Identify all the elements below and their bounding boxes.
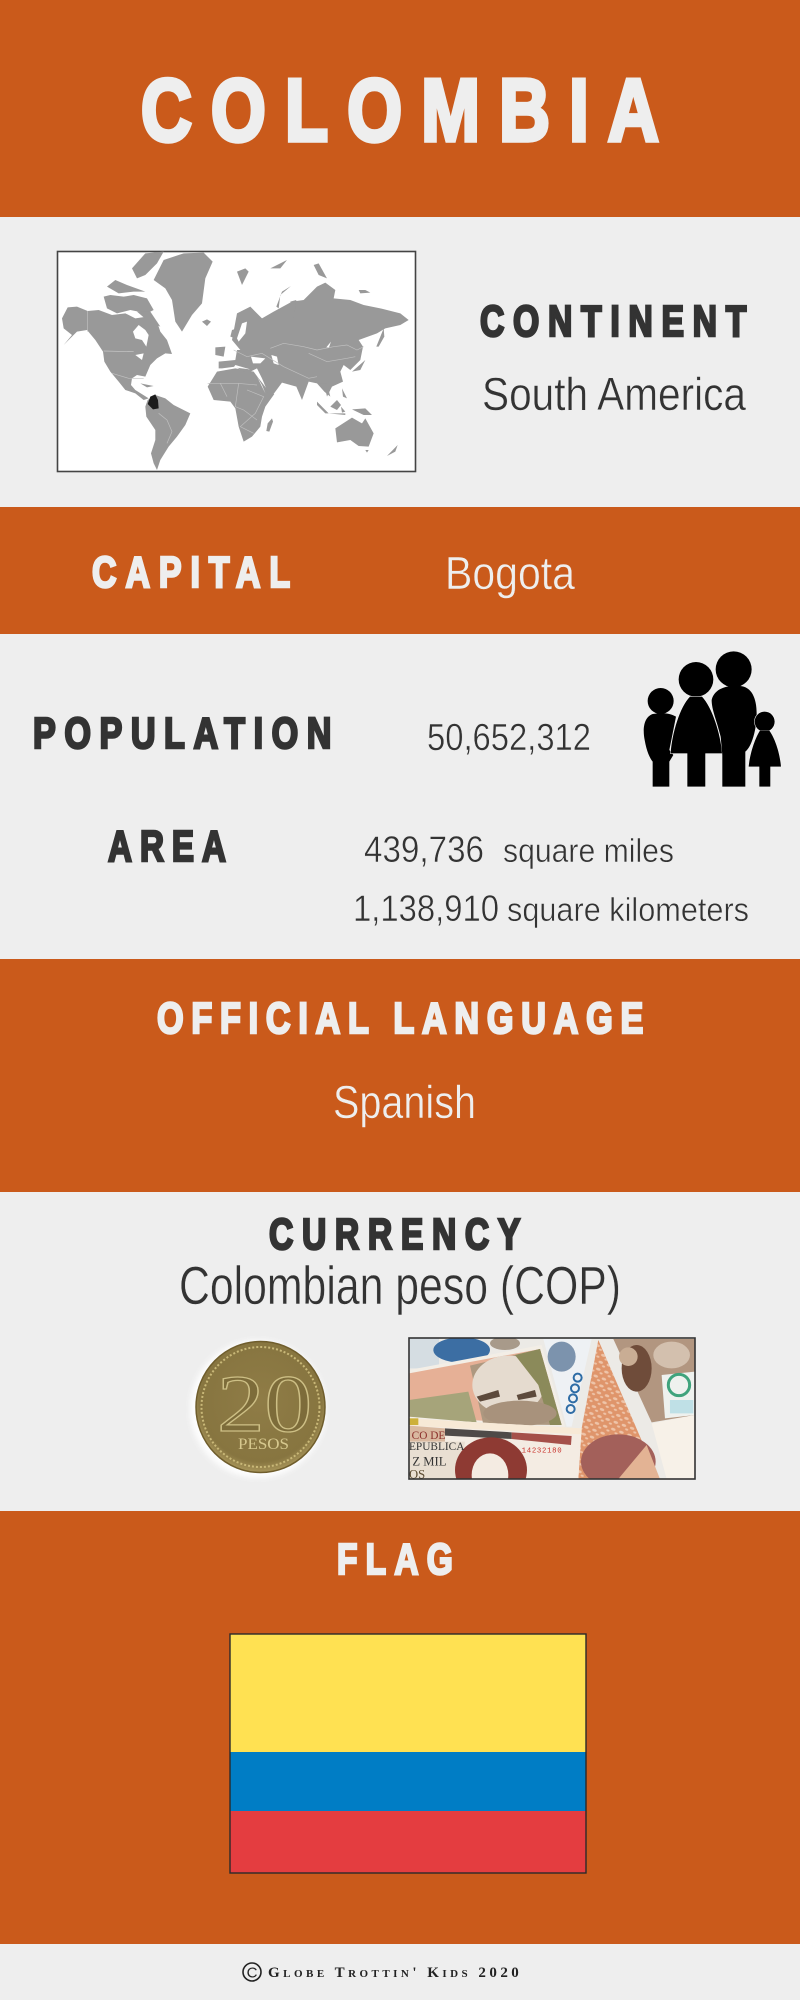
panel: population and area bbox=[33, 651, 781, 929]
image: banknotes: CO DE bbox=[412, 1430, 445, 1442]
language value: Spanish bbox=[333, 1076, 476, 1128]
currency value: Colombian peso (COP) bbox=[179, 1256, 621, 1316]
panel: flag bbox=[0, 1511, 800, 1944]
icon: 20 peso coin: 20 bbox=[217, 1358, 312, 1449]
language label: OFFICIAL LANGUAGE bbox=[157, 994, 651, 1043]
footer credit: Globe Trottin' Kids 2020 bbox=[268, 1965, 522, 1981]
area value: square kilometers: 1,138,910 bbox=[353, 888, 499, 929]
title: COLOMBIA bbox=[141, 61, 678, 160]
image: banknotes: Z MIL bbox=[412, 1455, 446, 1469]
image: banknotes: OS bbox=[409, 1467, 425, 1481]
flag label: FLAG bbox=[337, 1535, 461, 1584]
population label: POPULATION bbox=[33, 709, 340, 758]
continent value: South America bbox=[482, 368, 746, 420]
area value: square miles: square miles bbox=[503, 832, 674, 869]
icon: family bbox=[644, 651, 781, 787]
footer credit: C bbox=[247, 1964, 258, 1982]
panel: official language bbox=[0, 959, 800, 1192]
panel: capital bbox=[0, 507, 800, 634]
world map bbox=[58, 252, 416, 472]
area value: square miles: 439,736 bbox=[364, 829, 484, 870]
currency label: CURRENCY bbox=[269, 1210, 529, 1259]
panel: continent bbox=[58, 252, 755, 472]
image: banknotes: 14232180 bbox=[522, 1447, 562, 1455]
population value: 50,652,312 bbox=[427, 717, 591, 759]
panel: currency bbox=[181, 1217, 696, 1480]
icon: 20 peso coin: PESOS bbox=[238, 1436, 289, 1453]
capital label: CAPITAL bbox=[92, 548, 299, 597]
area value: square kilometers: square kilometers bbox=[507, 891, 749, 928]
map marker: Colombia bbox=[148, 394, 159, 409]
icon: 20 peso coin bbox=[190, 1340, 326, 1478]
image: banknotes bbox=[408, 1337, 696, 1480]
capital value: Bogota bbox=[445, 547, 575, 599]
area value: square kilometers bbox=[353, 888, 749, 929]
header panel bbox=[0, 0, 800, 217]
area value: square miles bbox=[364, 829, 674, 870]
flag of Colombia bbox=[230, 1634, 586, 1873]
area label: AREA bbox=[108, 822, 234, 871]
image: banknotes: EPUBLICA bbox=[409, 1441, 465, 1453]
